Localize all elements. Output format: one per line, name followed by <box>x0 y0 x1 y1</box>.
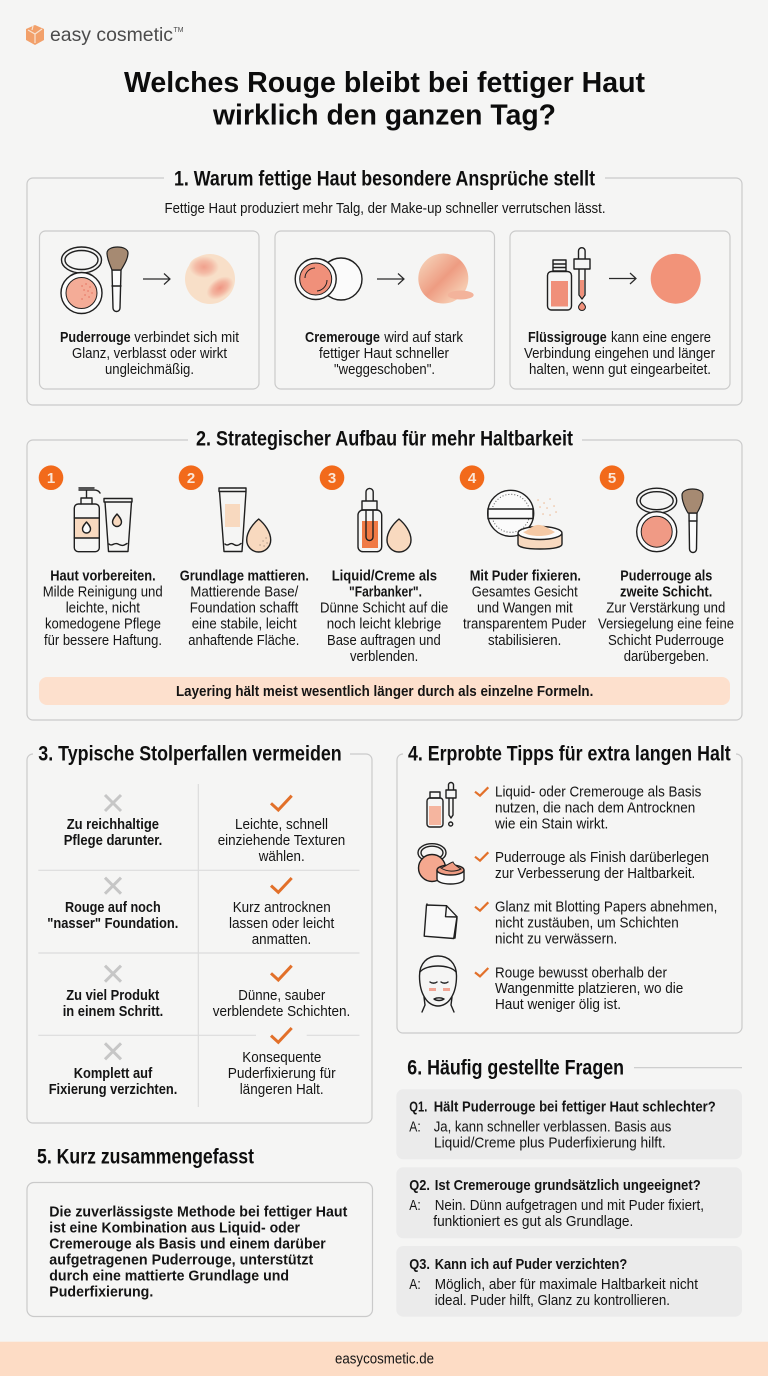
step 1 <box>39 465 163 649</box>
row 1: Pflege darunter. <box>64 832 162 849</box>
row 1: wählen. <box>258 848 305 865</box>
step text: darübergeben. <box>624 648 709 665</box>
badge 5 <box>600 465 624 490</box>
step text: "Farbanker". <box>349 584 422 601</box>
badge 3 <box>320 465 344 490</box>
badge 2: 2 <box>187 470 195 487</box>
step text: noch leicht klebrige <box>327 616 441 633</box>
step text: stabilisieren. <box>488 632 561 649</box>
icon: powder compact and brush <box>637 488 703 552</box>
faq 3: Kann ich auf Puder verzichten? <box>435 1256 627 1273</box>
icon: cross <box>105 1043 121 1059</box>
tip 2: zur Verbesserung der Haltbarkeit. <box>495 865 695 882</box>
arrow <box>609 273 636 284</box>
step text: Versiegelung eine feine <box>598 616 734 633</box>
arrow <box>377 274 404 284</box>
tip 4: Rouge bewusst oberhalb der <box>495 964 667 981</box>
card: powder rouge <box>40 231 259 389</box>
tip 4: Wangenmitte platzieren, wo die <box>495 980 683 997</box>
panel: summary: Puderfixierung. <box>49 1284 153 1300</box>
step text: Schicht Puderrouge <box>608 632 724 649</box>
faq 2: funktioniert es gut als Grundlage. <box>433 1213 633 1230</box>
icon: check <box>475 852 488 861</box>
icon: dropper bottle <box>427 782 456 827</box>
card text: halten, wenn gut eingearbeitet. <box>529 361 711 378</box>
badge 4 <box>460 465 484 490</box>
icon: pump bottle and tube <box>74 488 132 552</box>
row 3: Zu viel Produkt <box>66 987 159 1004</box>
card text: kann eine engere <box>611 329 711 346</box>
icon: check <box>271 878 292 892</box>
step 3 <box>320 465 448 665</box>
icon: check <box>271 796 292 810</box>
faq 2: Ist Cremerouge grundsätzlich ungeeignet? <box>435 1177 701 1194</box>
row 1: einziehende Texturen <box>218 832 345 849</box>
panel: summary: Cremerouge als Basis und einem darüber <box>49 1236 326 1252</box>
footer <box>0 1342 768 1376</box>
card text: Verbindung eingehen und länger <box>524 345 715 362</box>
row 3: in einem Schritt. <box>63 1003 163 1020</box>
step text <box>320 568 448 665</box>
banner: layering note <box>39 677 730 705</box>
step text <box>43 568 163 649</box>
step text: Base auftragen und <box>327 632 441 649</box>
badge 1 <box>39 465 63 490</box>
tip 4: Haut weniger ölig ist. <box>495 996 621 1013</box>
card text: Puderrouge <box>60 329 131 346</box>
faq 1 <box>396 1089 742 1159</box>
faq 2: Nein. Dünn aufgetragen und mit Puder fixiert, <box>435 1197 704 1214</box>
faq 3: Q3. <box>409 1256 430 1273</box>
heading: section 2: 2. Strategischer Aufbau für mehr Haltbarkeit <box>196 428 573 450</box>
step text: Mattierende Base/ <box>190 584 299 601</box>
step text: Puderrouge als <box>620 568 712 585</box>
step text: für bessere Haftung. <box>44 632 162 649</box>
row 3: Dünne, sauber <box>238 987 325 1004</box>
icon: blotting papers <box>424 904 457 938</box>
panel: summary: durch eine mattierte Grundlage und <box>49 1268 289 1284</box>
icon: powder compact and brush <box>61 247 128 314</box>
faq 1: Ja, kann schneller verblassen. Basis aus <box>434 1118 671 1135</box>
tip 3: nicht zustäuben, um Schichten <box>495 915 679 932</box>
heading: section 1: 1. Warum fettige Haut besondere Ansprüche stellt <box>174 168 595 190</box>
heading: section 6 FAQ: 6. Häufig gestellte Fragen <box>407 1056 624 1079</box>
step text: komedogene Pflege <box>45 616 161 633</box>
card text: wird auf stark <box>383 329 463 346</box>
card text <box>60 329 240 378</box>
step text: Zur Verstärkung und <box>606 600 725 617</box>
card text: Glanz, verblasst oder wirkt <box>72 345 228 362</box>
banner: layering note: Layering hält meist wesentlich länger durch als einzelne Formeln. <box>176 683 593 700</box>
panel: summary <box>27 1182 372 1316</box>
step text: Haut vorbereiten. <box>50 568 156 585</box>
heading: section 5: 5. Kurz zusammengefasst <box>37 1145 254 1168</box>
footer: easycosmetic.de <box>335 1350 434 1367</box>
row 1: Zu reichhaltige <box>67 816 159 833</box>
tip 3: Glanz mit Blotting Papers abnehmen, <box>495 899 717 916</box>
row 4: Puderfixierung für <box>228 1065 336 1082</box>
icon: cross <box>105 966 121 982</box>
card text: verbindet sich mit <box>134 329 240 346</box>
tip 3 <box>424 899 717 948</box>
icon: serum dropper and sponge <box>358 488 411 552</box>
step text: leichte, nicht <box>66 600 141 617</box>
faq 3: Möglich, aber für maximale Haltbarkeit nicht <box>435 1276 699 1293</box>
icon: cross <box>105 795 121 811</box>
card text: Flüssigrouge <box>528 329 607 346</box>
row 4 <box>49 1028 336 1098</box>
step text: Liquid/Creme als <box>332 568 437 585</box>
faq 2: Q2. <box>409 1177 430 1194</box>
icon: check <box>475 787 488 796</box>
icon: check <box>475 902 488 911</box>
card text: ungleichmäßig. <box>105 361 194 378</box>
row 4: Komplett auf <box>74 1065 153 1082</box>
step text: Mit Puder fixieren. <box>470 568 581 585</box>
panel: summary: Die zuverlässigste Methode bei fettiger Haut <box>49 1204 347 1221</box>
step text: Foundation schafft <box>190 600 299 617</box>
badge 5: 5 <box>608 470 616 487</box>
logo: easy cosmetic <box>50 24 173 46</box>
row 2: "nasser" Foundation. <box>47 915 178 932</box>
icon: check <box>271 1028 292 1042</box>
card text <box>524 329 715 378</box>
icon: face with blush <box>420 956 456 1012</box>
step text <box>598 568 734 665</box>
logo: TM <box>174 27 184 34</box>
card text: "weggeschoben". <box>334 361 435 378</box>
row 2: anmatten. <box>252 931 311 948</box>
badge 4: 4 <box>468 470 477 487</box>
card: cream rouge <box>275 231 494 389</box>
icon: cross <box>105 878 121 894</box>
step 2 <box>179 465 309 649</box>
row 4: Fixierung verzichten. <box>49 1081 177 1098</box>
card text: fettiger Haut schneller <box>319 345 449 362</box>
icon: check <box>475 968 488 976</box>
panel: section 4 tips <box>397 743 742 1033</box>
step text: zweite Schicht. <box>620 584 712 601</box>
tip 1: wie ein Stain wirkt. <box>494 816 608 832</box>
faq 1: Liquid/Creme plus Puderfixierung hilft. <box>434 1134 666 1151</box>
step text: anhaftende Fläche. <box>188 632 299 649</box>
icon: cream compact <box>295 258 362 300</box>
row 2: Kurz antrocknen <box>233 899 331 916</box>
icon: foundation tube and sponge <box>219 488 271 552</box>
title <box>124 67 646 132</box>
step text: Milde Reinigung und <box>43 584 163 601</box>
title: Welches Rouge bleibt bei fettiger Haut <box>124 67 646 99</box>
step text: Grundlage mattieren. <box>180 568 309 585</box>
step text: Gesamtes Gesicht <box>472 584 578 601</box>
badge 2 <box>179 465 203 490</box>
heading: section 3: 3. Typische Stolperfallen vermeiden <box>38 743 342 766</box>
panel: summary: aufgetragenen Puderrouge, unterstützt <box>49 1252 313 1268</box>
badge 3: 3 <box>328 470 336 487</box>
panel: section 3 pitfalls <box>27 743 372 1123</box>
icon: liquid bottle with dropper <box>548 248 590 310</box>
icon: even colour swatch <box>651 254 701 304</box>
faq 3: A: <box>409 1276 421 1293</box>
panel: section 2 layering steps <box>27 428 742 720</box>
tip 1: nutzen, die nach dem Antrocknen <box>495 800 695 817</box>
row 1 <box>64 795 345 865</box>
tip 1: Liquid- oder Cremerouge als Basis <box>495 784 701 801</box>
title: wirklich den ganzen Tag? <box>212 100 556 132</box>
step 4 <box>460 465 586 649</box>
faq 1: A: <box>409 1118 421 1135</box>
tip 1 <box>427 782 701 832</box>
step text: und Wangen mit <box>477 600 573 617</box>
card text <box>305 329 463 378</box>
step text: verblenden. <box>350 648 418 665</box>
icon: powder puff and loose powder jar <box>488 490 562 549</box>
row 3 <box>63 966 350 1020</box>
card: liquid rouge <box>510 231 730 389</box>
step text: Dünne Schicht auf die <box>320 600 448 617</box>
row 4: längeren Halt. <box>240 1081 324 1098</box>
step text: eine stabile, leicht <box>192 616 297 633</box>
icon: check <box>271 966 292 980</box>
step 5 <box>598 465 734 665</box>
step text: transparentem Puder <box>463 616 586 633</box>
row 2 <box>47 878 335 948</box>
row 4: Konsequente <box>242 1049 321 1066</box>
tip 2: Puderrouge als Finish darüberlegen <box>495 849 709 866</box>
icon: skin with patchy powder <box>185 254 238 304</box>
tip 4 <box>420 956 683 1013</box>
tip 3: nicht zu verwässern. <box>495 931 617 948</box>
step text <box>463 568 586 649</box>
intro text: Fettige Haut produziert mehr Talg, der Make-up schneller verrutschen lässt. <box>164 200 606 217</box>
row 2: Rouge auf noch <box>65 899 161 916</box>
step text <box>180 568 309 649</box>
row 1: Leichte, schnell <box>235 816 328 833</box>
badge 1: 1 <box>47 470 55 487</box>
tip 2 <box>418 844 709 884</box>
card text: Cremerouge <box>305 329 380 346</box>
icon: compact and cream jar <box>418 844 464 884</box>
faq 3 <box>396 1246 742 1317</box>
faq 2 <box>396 1167 742 1238</box>
faq 3: ideal. Puder hilft, Glanz zu kontrollieren. <box>435 1292 670 1309</box>
row 3: verblendete Schichten. <box>213 1003 350 1020</box>
faq 1: Q1. <box>409 1099 427 1116</box>
icon: skin with pushed cream <box>418 254 474 304</box>
panel: summary: ist eine Kombination aus Liquid- oder <box>49 1220 300 1236</box>
faq 2: A: <box>409 1197 421 1214</box>
arrow <box>143 274 170 284</box>
panel: section 1 why oily skin <box>27 168 742 405</box>
row 2: lassen oder leicht <box>229 915 335 932</box>
faq 1: Hält Puderrouge bei fettiger Haut schlechter? <box>434 1099 716 1116</box>
